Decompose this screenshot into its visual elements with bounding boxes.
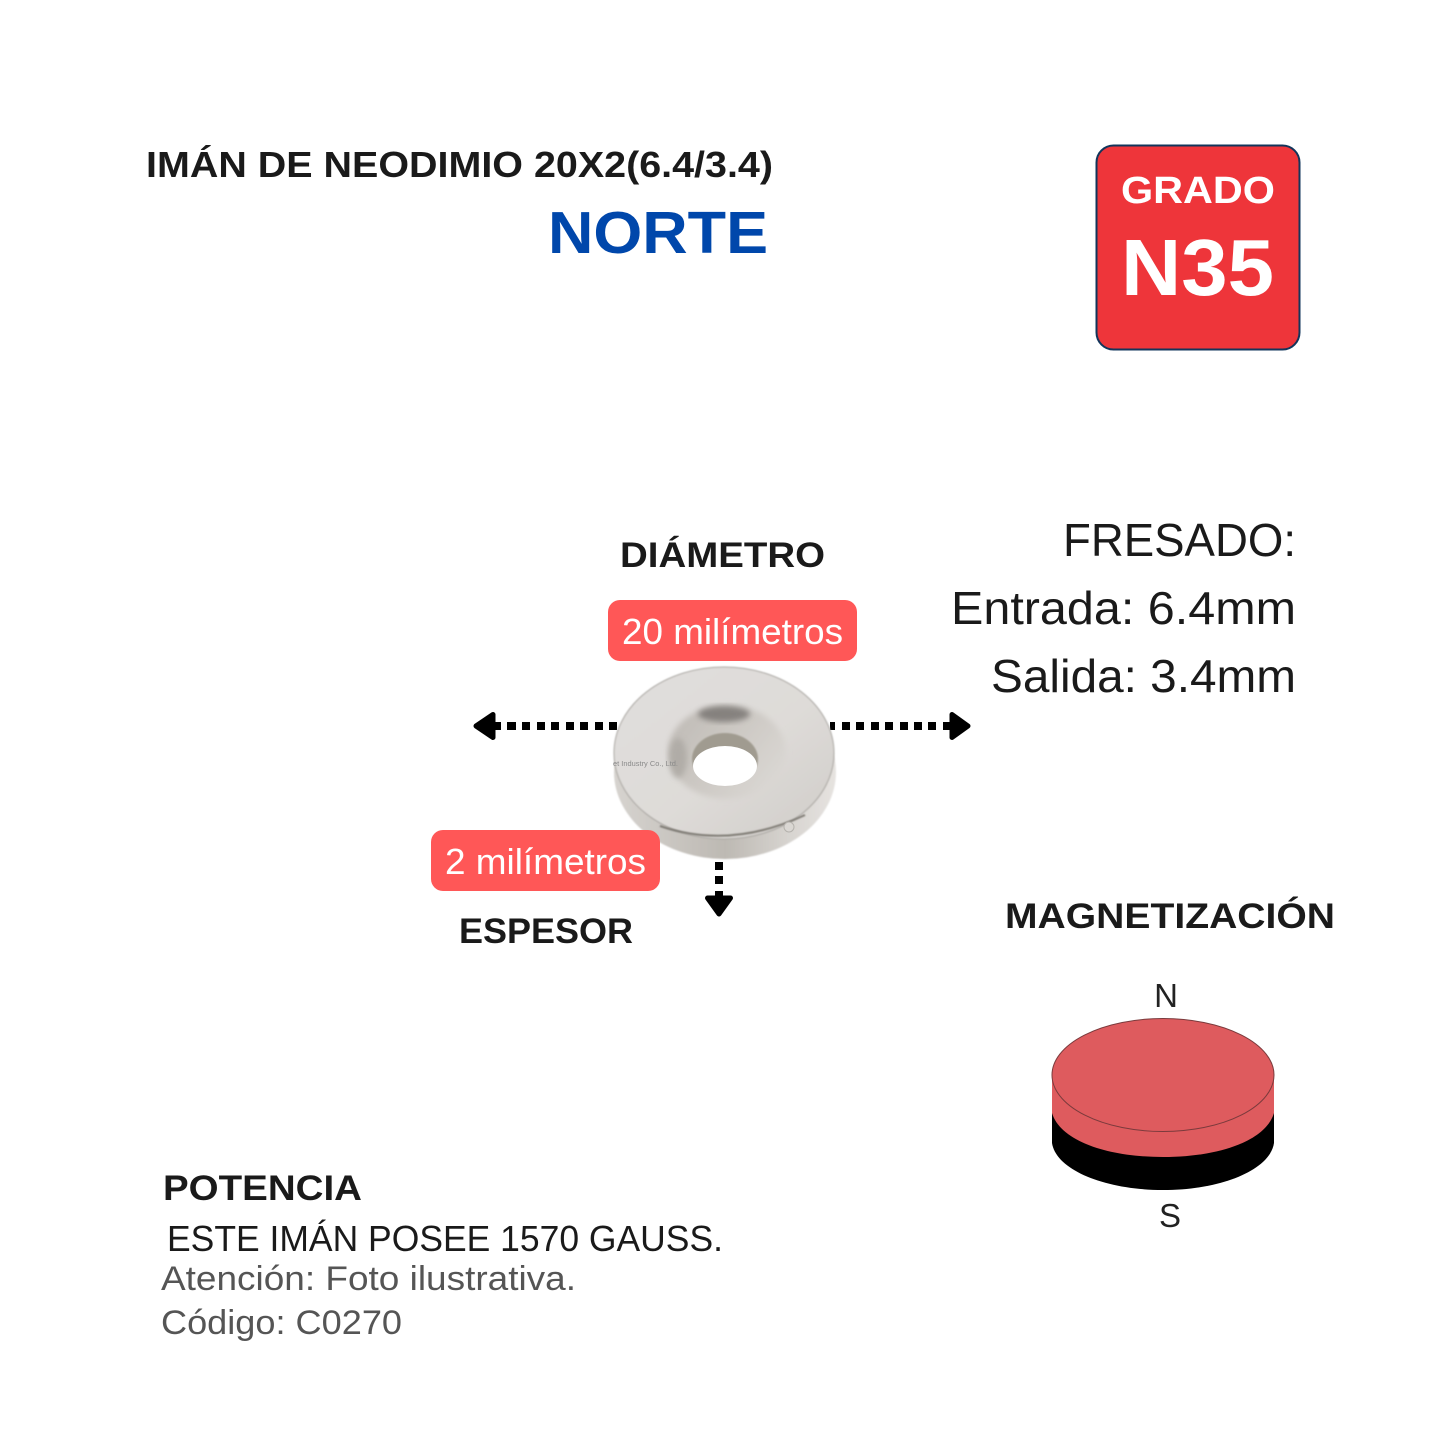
arrow: diameter left: [476, 714, 617, 738]
text block: fresado: Salida: 3.4mm: [991, 650, 1296, 702]
badge: 2 milímetros: [431, 830, 660, 891]
heading: espesor: ESPESOR: [459, 912, 633, 951]
inner hole wall: [692, 733, 758, 785]
heading: magnetización: MAGNETIZACIÓN: [1005, 896, 1335, 936]
rim highlight line: [660, 815, 805, 836]
badge: grado N35: GRADO: [1121, 170, 1275, 212]
label: N pole: N: [1154, 977, 1178, 1014]
note: foto ilustrativa: Atención: Foto ilustrativa.: [161, 1260, 576, 1298]
arrow: diameter right: [830, 714, 968, 738]
badge: grado N35: N35: [1121, 223, 1274, 312]
label: S pole: S: [1159, 1197, 1181, 1234]
magnet top face: [614, 667, 834, 839]
side nub: [784, 822, 794, 832]
left cone shade: [669, 738, 687, 778]
heading: potencia: POTENCIA: [163, 1169, 362, 1208]
product photo: countersunk ring magnet: [613, 667, 836, 859]
arrow: thickness down: [708, 862, 730, 914]
heading: diámetro: DIÁMETRO: [620, 535, 825, 575]
text block: fresado: [951, 514, 1296, 702]
badge: 20 milímetros: 20 milímetros: [622, 611, 843, 652]
badge: 20 milímetros: [608, 600, 857, 661]
text: gauss: ESTE IMÁN POSEE 1570 GAUSS.: [167, 1218, 723, 1259]
magnet rim: [614, 685, 836, 859]
dark reflection: [698, 706, 750, 722]
watermark: et Industry Co., Ltd.: [613, 759, 678, 768]
north pole top: [1052, 1018, 1274, 1132]
badge: 2 milímetros: 2 milímetros: [445, 841, 646, 882]
text block: fresado: FRESADO:: [1063, 514, 1296, 566]
countersink: [668, 705, 786, 799]
badge: grado N35: [1096, 146, 1300, 350]
center hole: [693, 746, 757, 786]
text block: fresado: Entrada: 6.4mm: [951, 582, 1296, 634]
diagram: magnetized disc: [1052, 1018, 1274, 1190]
subtitle: NORTE: NORTE: [548, 200, 768, 266]
note: código: Código: C0270: [161, 1304, 402, 1342]
south pole: [1052, 1110, 1274, 1190]
title: IMÁN DE NEODIMIO 20X2(6.4/3.4): [146, 144, 773, 185]
north pole side: [1052, 1075, 1274, 1157]
